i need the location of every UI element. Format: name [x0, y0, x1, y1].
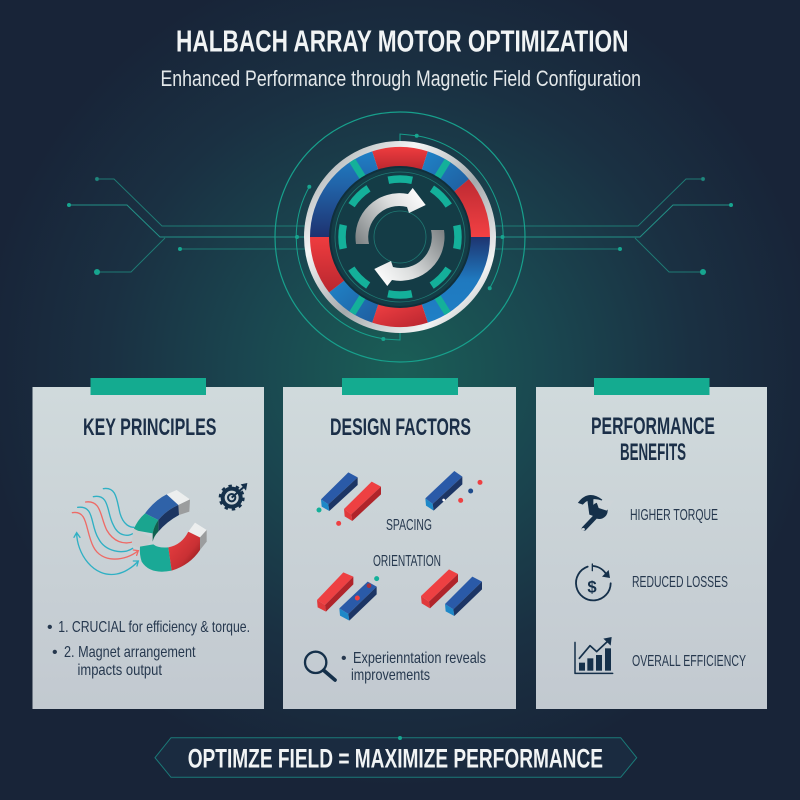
teal pole markers	[342, 179, 458, 295]
motor diagram	[275, 112, 525, 362]
magnet bars: spacing	[316, 471, 482, 526]
magnet bars: orientation	[317, 569, 482, 621]
heading: KEY PRINCIPLES	[83, 414, 216, 441]
panel: performance benefits	[536, 378, 767, 709]
icon: magnifying glass	[305, 652, 335, 680]
tab	[594, 378, 710, 395]
label: higher torque: HIGHER TORQUE	[630, 507, 718, 524]
text: experimentation note: Experienntation reveals	[353, 650, 486, 667]
inner stator disc	[330, 167, 470, 307]
text: principle 2: •	[52, 644, 58, 661]
label: overall efficiency: OVERALL EFFICIENCY	[632, 653, 746, 670]
icon: gear with target	[220, 483, 247, 509]
text: principle 2: 2. Magnet arrangement	[64, 644, 196, 661]
label: orientation: ORIENTATION	[373, 553, 441, 570]
icon: dollar cycle: $	[587, 578, 597, 597]
heading: PERFORMANCE	[591, 413, 715, 440]
title: HALBACH ARRAY MOTOR OPTIMIZATION	[176, 24, 628, 59]
text: principle 2	[52, 644, 196, 679]
text: experimentation note: •	[341, 650, 347, 667]
panel: key principles	[32, 378, 264, 709]
icon: horseshoe magnet with field lines	[72, 488, 207, 574]
magnet segments	[310, 147, 490, 327]
icon: dollar cycle	[576, 564, 611, 600]
text: principle 1: 1. CRUCIAL for efficiency & torque.	[58, 619, 250, 636]
heading: DESIGN FACTORS	[330, 414, 471, 441]
panel: design factors	[283, 378, 516, 709]
rotation arrows	[355, 188, 445, 286]
text: principle 2: impacts output	[78, 662, 162, 679]
text: experimentation note	[341, 650, 486, 684]
panel: performance benefits: BENEFITS	[620, 439, 686, 466]
tab	[342, 378, 458, 395]
label: spacing: SPACING	[386, 517, 432, 534]
silver outer ring	[304, 141, 496, 333]
label: reduced losses: REDUCED LOSSES	[632, 574, 728, 591]
subtitle: Enhanced Performance through Magnetic Field Configuration	[160, 66, 641, 91]
icon: wrench	[579, 496, 614, 531]
bottom banner	[155, 736, 637, 777]
orbit rings and connectors	[275, 112, 525, 362]
text: principle 1: •	[47, 619, 53, 636]
banner text: OPTIMZE FIELD = MAXIMIZE PERFORMANCE	[188, 743, 603, 773]
text: experimentation note: improvements	[351, 667, 430, 684]
tab	[90, 378, 206, 395]
icon: growth chart	[575, 637, 613, 673]
circuit lines left	[67, 177, 320, 275]
circuit lines right	[480, 177, 733, 275]
